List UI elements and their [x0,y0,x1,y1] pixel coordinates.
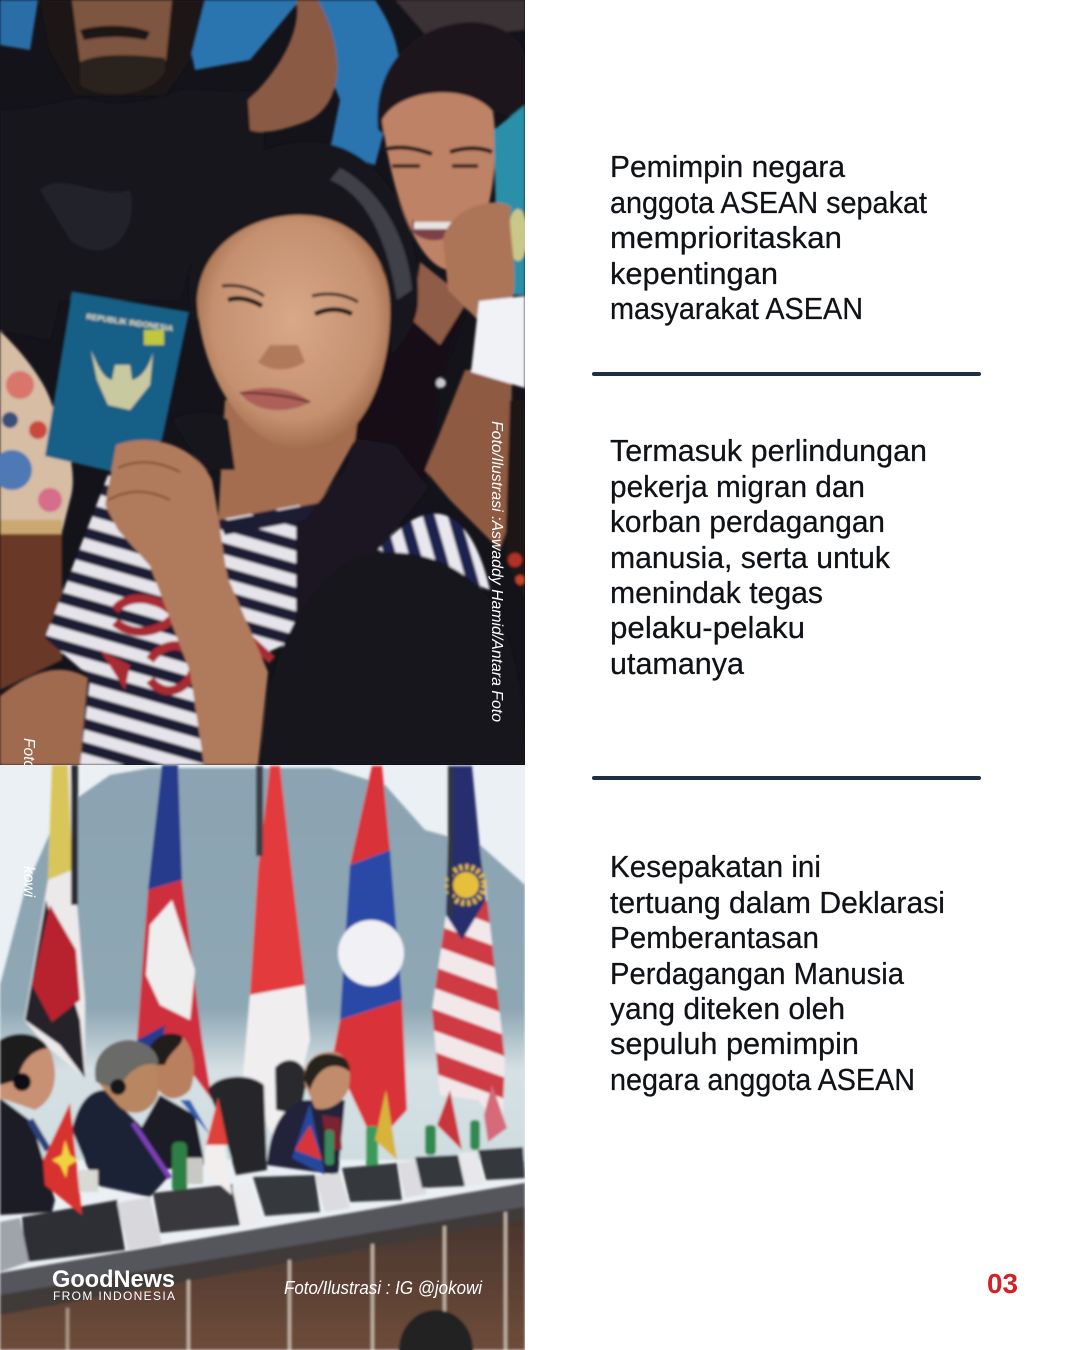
text block 2: utamanya [610,646,745,681]
delegate 3 [140,1034,210,1170]
floral sleeve [0,331,73,690]
text block 3: Kesepakatan ini [610,849,821,884]
text block 2: pekerja migran dan [610,469,865,504]
text block 3: Perdagangan Manusia [610,956,905,991]
flag: Malaysia [432,766,505,1130]
text block 2 [610,433,927,681]
mountain [0,768,525,1040]
black chair [208,1077,267,1175]
right woman [345,22,528,600]
table [0,1218,525,1350]
text block 2: korban perdagangan [610,504,885,539]
text block 3: Pemberantasan [610,920,819,955]
striped shirt [45,475,300,765]
photo credit vertical: Foto/Ilustrasi :Aswaddy Hamid/Antara Foto [488,421,505,722]
passport left [45,292,189,472]
harbour haze [0,1010,525,1160]
face [197,215,390,450]
hair [190,142,418,355]
cut-off credit bottom: kowi [20,866,37,898]
hand and forearm [105,440,268,765]
photo credit: Foto/Ilustrasi : IG @jokowi [284,1278,483,1298]
photo: migrant workers holding passports [0,0,528,769]
backpack strap [194,416,236,472]
text block 3 [610,849,945,1097]
shirt print [115,599,272,691]
text block 1: Pemimpin negara [610,149,846,184]
man in black shirt [0,0,337,340]
text block 3: negara anggota ASEAN [610,1062,915,1097]
text block 3: yang diteken oleh [610,991,845,1026]
logo: GoodNews from Indonesia: GoodNews [52,1266,175,1293]
cut-off credit top: Foto [20,738,37,769]
speaker: Anwar [267,1052,350,1175]
blue shirt [180,0,399,165]
photo: ASEAN leaders at summit table with flags [0,765,525,1350]
text block 1: kepentingan [610,256,778,291]
text block 2: manusia, serta untuk [610,540,890,575]
text block 2: pelaku-pelaku [610,610,805,645]
logo: GoodNews from Indonesia: FROM INDONESIA [53,1289,175,1303]
text block 1: anggota ASEAN sepakat [610,185,927,220]
neck [218,400,360,522]
text block 1: masyarakat ASEAN [610,291,863,326]
table flags [43,1085,507,1215]
page number: 03 [987,1268,1018,1299]
flag: Brunei [24,765,85,1078]
white cups and bottles [78,1120,480,1192]
head foreground [399,1310,473,1350]
text block 3: tertuang dalam Deklarasi [610,885,945,920]
desk units [0,1147,525,1272]
text block 2: Termasuk perlindungan [610,433,927,468]
central woman [45,142,490,765]
flag: Indonesia [243,766,310,1135]
passport left: REPUBLIK INDONESIA [86,312,174,333]
dark head foreground [260,551,483,757]
text block 2: menindak tegas [610,575,823,610]
text block 3: sepuluh pemimpin [610,1026,859,1061]
text block 1: memprioritaskan [610,220,842,255]
delegate 1 [0,1034,55,1215]
flag: Laos [333,766,407,1145]
text block 1 [610,149,927,326]
flag: Cambodia [137,765,212,1100]
delegate 2 [72,1040,170,1197]
divider 1 [592,372,981,376]
divider 2 [592,776,981,780]
